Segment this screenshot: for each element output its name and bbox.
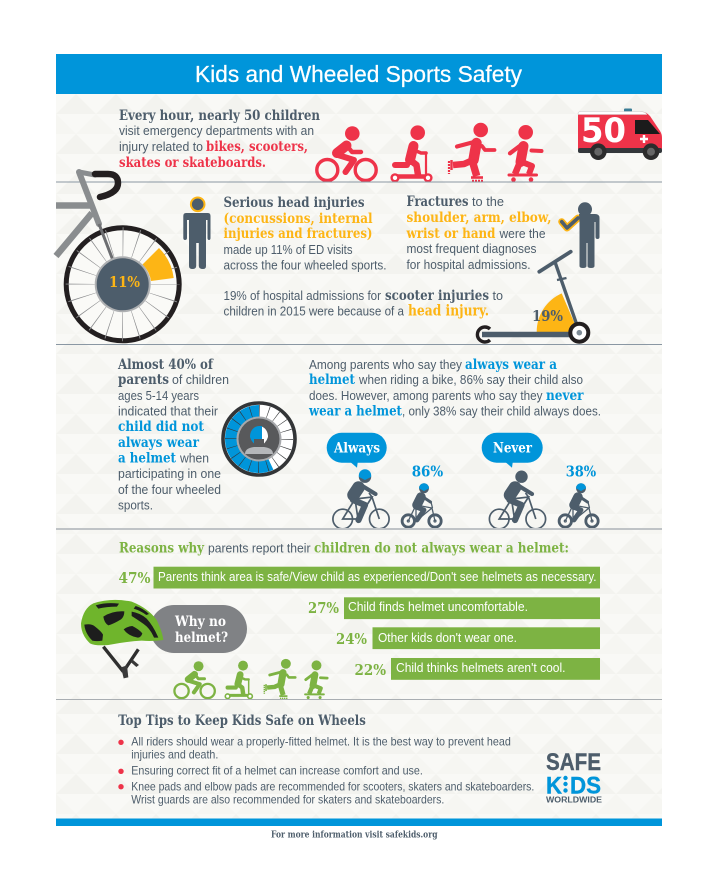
text block: almost 40 percent: always wear (118, 435, 200, 451)
text block: every hour: Every hour, nearly 50 children (119, 108, 320, 124)
text block: serious head injuries: Serious head injuries (224, 195, 365, 211)
heading: reasons: parents report their (208, 540, 311, 556)
text block: almost 40 percent: a helmet (118, 450, 177, 466)
icon: child cyclist with helmet (402, 483, 441, 527)
list: tips: All riders should wear a properly-fitted helmet. It is the best way to prevent head (131, 735, 511, 749)
icon: green bike helmet (81, 600, 163, 678)
text block: fractures: most frequent diagnoses (406, 241, 537, 256)
icon: ambulance with 50: 50 (581, 111, 626, 151)
panel: parents and helmet use (117, 357, 601, 529)
text block: serious head injuries: (concussions, internal (224, 211, 372, 227)
text block: scooter head injuries: 19% of hospital admissions for (224, 288, 382, 303)
text block: serious head injuries (224, 195, 386, 272)
icon: red scooter rider (392, 125, 431, 181)
text block: scooter head injuries: to (492, 288, 503, 303)
divider line (56, 344, 662, 345)
bar: 27 percent: Child finds helmet uncomfortable. (348, 599, 528, 614)
icon: red cyclist (317, 126, 376, 180)
panel: reasons for not wearing helmets (81, 540, 600, 699)
text block: always and never helmet: always wear a (465, 357, 557, 373)
list: tips: Knee pads and elbow pads are recommended for scooters, skaters and skateboarders. (131, 780, 534, 794)
bar: 47 percent: Parents think area is safe/View child as experienced/Don't see helmets as necessary. (158, 569, 596, 584)
logo: safe kids worldwide (546, 749, 603, 804)
list: tips: Wrist guards are also recommended for skaters and skateboarders. (131, 792, 444, 806)
footer band (56, 818, 662, 826)
page background panel (56, 94, 662, 819)
header: title band (56, 54, 662, 94)
icon: adult cyclist without helmet (489, 470, 546, 529)
text block: always and never helmet (308, 357, 601, 420)
divider line (56, 528, 662, 530)
stat: 38 percent: 38% (566, 462, 596, 480)
divider line (56, 699, 662, 700)
logo: safe kids worldwide: K (546, 772, 562, 799)
chart: wheel showing 11 percent (66, 224, 179, 341)
panel: every hour statistic (119, 108, 662, 182)
text block: serious head injuries: made up 11% of ED visits (224, 242, 353, 257)
icon: person with arm highlighted (562, 202, 600, 268)
panel: head injuries and fractures (56, 172, 600, 342)
icon: green cyclist (174, 661, 215, 698)
callout: why no helmet (150, 605, 247, 653)
text block: almost 40 percent: parents (118, 372, 169, 388)
text block: almost 40 percent: when (179, 450, 209, 466)
icon: green skateboarder (305, 660, 327, 699)
logo: safe kids worldwide: SAFE (546, 749, 601, 776)
icon: red inline skater (449, 123, 494, 181)
text block: every hour (119, 108, 320, 171)
bar: 47 percent (118, 567, 600, 588)
text block: always and never helmet: , only 38% say their child always does. (402, 404, 601, 418)
bar: 22 percent (354, 658, 600, 680)
text block: almost 40 percent: of children (172, 372, 229, 387)
icon: red skateboarder (509, 125, 542, 182)
text block: every hour: bikes, scooters, (206, 139, 308, 155)
text block: fractures: for hospital admissions. (406, 257, 530, 272)
bar: 47 percent: 47% (118, 569, 150, 587)
text block: fractures: wrist or hand (406, 226, 496, 242)
text block: fractures: to the (472, 194, 504, 209)
text block: scooter head injuries: scooter injuries (385, 288, 489, 304)
stat: 86 percent: 86% (412, 462, 443, 480)
text block: almost 40 percent: of the four wheeled (118, 482, 221, 497)
text block: always and never helmet: never (546, 388, 584, 404)
icon: adult cyclist with helmet (333, 469, 389, 529)
text block: scooter head injuries: children in 2015 were because of a (224, 304, 405, 318)
footer text: For more information visit safekids.org (271, 831, 438, 841)
bar: 24 percent: Other kids don't wear one. (378, 630, 517, 645)
text block: almost 40 percent: ages 5-14 years (118, 388, 199, 403)
icon: person with head highlighted (183, 198, 210, 269)
text block: scooter head injuries (224, 288, 503, 320)
heading: reasons: children do not always wear a helmet: (314, 540, 569, 556)
text block: serious head injuries: across the four wheeled sports. (224, 258, 386, 272)
text block: every hour: injury related to (119, 139, 203, 154)
chart: helmet wheel (223, 403, 295, 475)
text block: serious head injuries: injuries and fractures) (224, 226, 372, 242)
icon: bicycle frame (56, 172, 118, 256)
chart: scooter showing 19 percent: 19% (532, 307, 563, 325)
chart: wheel showing 11 percent: 11% (109, 273, 140, 291)
callout: always bubble (327, 433, 387, 468)
logo: safe kids worldwide: DS (570, 772, 601, 799)
divider line (56, 182, 662, 183)
logo: safe kids worldwide: WORLDWIDE (546, 796, 603, 804)
text block: always and never helmet: when riding a bike, 86% say their child also (358, 372, 583, 387)
title: Kids and Wheeled Sports Safety (195, 61, 522, 87)
text block: every hour: skates or skateboards. (119, 155, 266, 171)
list: tips: injuries and death. (131, 748, 218, 762)
bar: 22 percent: Child thinks helmets aren't cool. (396, 660, 566, 675)
list: tips: Ensuring correct fit of a helmet can increase comfort and use. (131, 764, 423, 778)
text block: almost 40 percent: sports. (118, 498, 153, 512)
callout: never bubble: Never (493, 440, 533, 456)
text block: every hour: visit emergency departments with an (119, 123, 314, 138)
chart: scooter showing 19 percent (477, 252, 588, 342)
heading: reasons (119, 540, 569, 556)
text block: almost 40 percent: Almost 40% of (117, 357, 214, 373)
text block: always and never helmet: does. However, among parents who say they (309, 388, 543, 403)
callout: never bubble (482, 433, 543, 468)
text block: always and never helmet: helmet (309, 372, 356, 388)
heading: top tips: Top Tips to Keep Kids Safe on Wheels (118, 713, 366, 729)
icon: green scooter rider (225, 661, 252, 699)
callout: always bubble: Always (333, 440, 380, 456)
text block: fractures: were the (499, 226, 546, 241)
text block: scooter head injuries: head injury. (408, 302, 489, 320)
bar: 27 percent (308, 597, 600, 619)
callout: why no helmet: helmet? (175, 630, 228, 646)
text block: almost 40 percent: child did not (118, 419, 205, 435)
text block: fractures (406, 194, 552, 272)
text block: always and never helmet: wear a helmet (308, 404, 403, 420)
bar: 27 percent: 27% (308, 599, 339, 617)
text block: fractures: Fractures (406, 194, 469, 210)
icon: green inline skater (264, 659, 295, 698)
bar: 24 percent (336, 627, 600, 649)
panel: top tips (118, 713, 603, 806)
text block: almost 40 percent: participating in one (118, 466, 221, 481)
callout: why no helmet: Why no (174, 614, 226, 630)
text block: fractures: shoulder, arm, elbow, (406, 210, 552, 226)
text block: almost 40 percent (117, 357, 229, 512)
bar: 22 percent: 22% (354, 661, 386, 679)
heading: reasons: Reasons why (119, 540, 205, 556)
bar: 24 percent: 24% (336, 630, 367, 648)
icon: ambulance with 50 (578, 108, 662, 160)
text block: always and never helmet: Among parents who say they (309, 357, 462, 372)
icon: child cyclist with helmet, never group (559, 483, 598, 527)
text block: almost 40 percent: indicated that their (118, 404, 219, 418)
list: tips (118, 735, 534, 806)
